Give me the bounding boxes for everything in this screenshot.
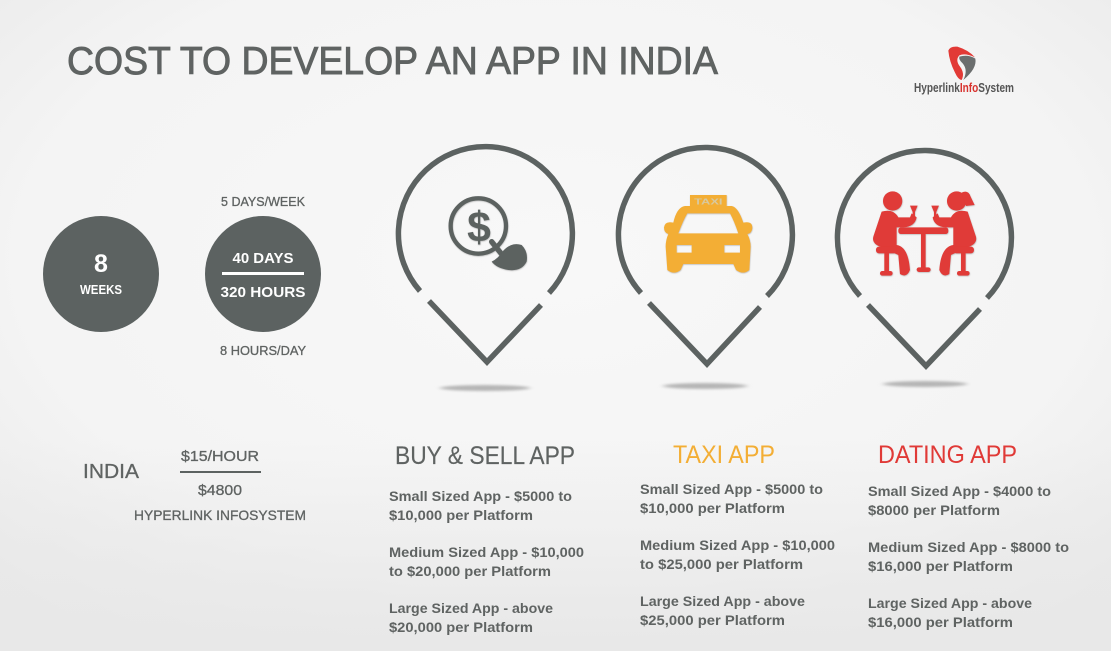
heading: taxi app: TAXI APP bbox=[673, 441, 775, 469]
price list: taxi bbox=[640, 481, 835, 628]
heading: buy and sell app: BUY & SELL APP bbox=[395, 442, 575, 470]
hourly rate: $15/HOUR bbox=[181, 448, 259, 465]
icon: dollar coin with tapping hand: $ bbox=[467, 204, 491, 252]
price list: buy and sell: $20,000 per Platform bbox=[389, 619, 533, 635]
icon: taxi bbox=[664, 195, 752, 273]
heading: dating app: DATING APP bbox=[878, 441, 1017, 469]
price list: buy and sell: Large Sized App - above bbox=[389, 600, 553, 616]
company: HYPERLINK INFOSYSTEM bbox=[134, 507, 306, 523]
icon: dollar coin with tapping hand bbox=[451, 198, 527, 270]
price list: dating: Large Sized App - above bbox=[868, 595, 1032, 611]
40 days: 40 DAYS bbox=[232, 250, 294, 267]
logo wordmark: HyperlinkInfoSystem bbox=[914, 80, 1014, 95]
label: 8 hours per day: 8 HOURS/DAY bbox=[220, 343, 306, 358]
stat: 40 days 320 hours circle bbox=[205, 216, 321, 332]
pin shadow bbox=[663, 383, 747, 389]
price list: dating: $16,000 per Platform bbox=[868, 614, 1013, 630]
pin: dating bbox=[837, 151, 1011, 387]
number 8: 8 bbox=[94, 250, 108, 278]
price list: buy and sell bbox=[389, 488, 584, 635]
price list: dating: Small Sized App - $4000 to bbox=[868, 483, 1051, 499]
label: 5 days per week: 5 DAYS/WEEK bbox=[221, 194, 305, 209]
pin shadow bbox=[440, 385, 530, 391]
india rate calculation bbox=[83, 448, 306, 523]
label weeks: WEEKS bbox=[80, 283, 122, 297]
price list: buy and sell: $10,000 per Platform bbox=[389, 507, 533, 523]
pin: taxi bbox=[618, 148, 792, 389]
price list: dating: $8000 per Platform bbox=[868, 502, 1000, 518]
pin: buy and sell bbox=[398, 147, 572, 391]
price list: dating: Medium Sized App - $8000 to bbox=[868, 539, 1069, 555]
icon: couple at table bbox=[873, 191, 976, 276]
logo: HyperlinkInfoSystem bbox=[914, 47, 1014, 95]
price list: taxi: $10,000 per Platform bbox=[640, 500, 785, 516]
320 hours: 320 HOURS bbox=[220, 284, 306, 301]
title: COST TO DEVELOP AN APP IN INDIA bbox=[67, 40, 718, 83]
label india: INDIA bbox=[83, 461, 140, 483]
total: $4800 bbox=[198, 482, 242, 499]
price list: taxi: $25,000 per Platform bbox=[640, 612, 785, 628]
price list: dating bbox=[868, 483, 1069, 630]
price list: taxi: Large Sized App - above bbox=[640, 593, 805, 609]
pin shadow bbox=[883, 381, 967, 387]
stat: 8 weeks circle bbox=[43, 216, 159, 332]
price list: buy and sell: Small Sized App - $5000 to bbox=[389, 488, 572, 504]
taxi sign text: TAXI bbox=[694, 198, 722, 207]
price list: dating: $16,000 per Platform bbox=[868, 558, 1013, 574]
price list: taxi: to $25,000 per Platform bbox=[640, 556, 803, 572]
price list: taxi: Medium Sized App - $10,000 bbox=[640, 537, 835, 553]
price list: taxi: Small Sized App - $5000 to bbox=[640, 481, 823, 497]
price list: buy and sell: to $20,000 per Platform bbox=[389, 563, 551, 579]
price list: buy and sell: Medium Sized App - $10,000 bbox=[389, 544, 584, 560]
logo mark bbox=[948, 47, 976, 80]
